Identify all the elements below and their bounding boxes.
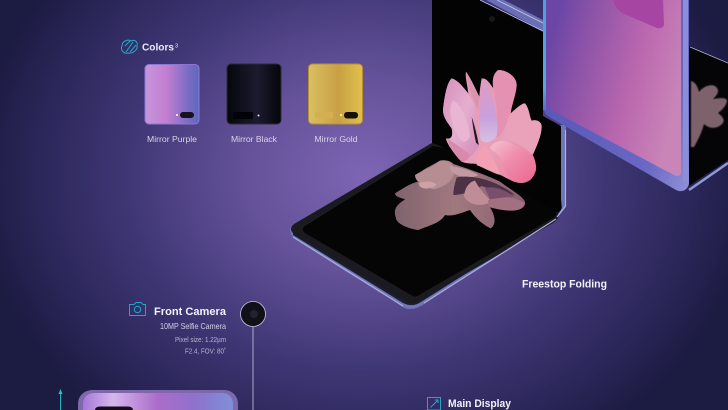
swatch: mirror gold (308, 64, 362, 124)
leader line (252, 326, 254, 410)
reflected petals (395, 160, 525, 230)
swatch: mirror purple (145, 64, 199, 124)
phone: main folded phone (290, 0, 566, 309)
rim of rear screen (689, 163, 728, 190)
side frame highlight (557, 130, 566, 217)
punch-hole camera (489, 16, 495, 22)
upper screen (432, 0, 561, 216)
dark slit (472, 117, 479, 145)
phone: rear open phone, back-right (543, 0, 728, 191)
lower screen bezel (291, 143, 558, 303)
text: pixel size: Pixel size: 1.22µm (175, 335, 226, 344)
outer rim of lower half (290, 100, 566, 309)
label: Mirror Purple: Mirror Purple (147, 134, 197, 144)
heading: Front Camera: Front Camera (154, 306, 227, 318)
label: Mirror Black: Mirror Black (231, 134, 278, 144)
reflected flower on rear phone (691, 81, 727, 147)
panel: colors (121, 40, 363, 144)
front petal (490, 141, 536, 183)
camera panel on back cover (613, 0, 664, 28)
right frame light (683, 0, 688, 182)
top edge band (486, 0, 543, 31)
heading: Colors: Colors (142, 42, 174, 54)
frame of back cover (543, 0, 689, 191)
caption: Freestop Folding: Freestop Folding (522, 278, 607, 290)
callout: front camera (130, 302, 266, 410)
icon: display diagonal (428, 398, 440, 410)
arrow: height dimension (58, 389, 62, 410)
swatch: mirror black (227, 64, 281, 124)
text: selfie camera: 10MP Selfie Camera (160, 321, 226, 331)
flower (395, 70, 542, 230)
lower edge highlight (293, 219, 556, 306)
phone: bottom device top edge (78, 390, 238, 410)
screen panel of rear phone (689, 46, 728, 186)
icon: camera lens circle (240, 302, 266, 326)
purple back cover (546, 0, 681, 176)
icon: palette (121, 40, 137, 53)
dark rim shading (293, 143, 562, 305)
callout: main display (428, 398, 512, 410)
lower screen (303, 146, 556, 296)
label: Mirror Gold: Mirror Gold (314, 134, 358, 144)
footnote mark: 3 (175, 44, 178, 50)
icon: camera (130, 302, 146, 316)
upright petals (443, 70, 542, 183)
left blue edge (543, 0, 546, 110)
heading: Main Display: Main Display (448, 398, 512, 410)
text: aperture: F2.4, FOV: 80˚ (185, 346, 226, 356)
